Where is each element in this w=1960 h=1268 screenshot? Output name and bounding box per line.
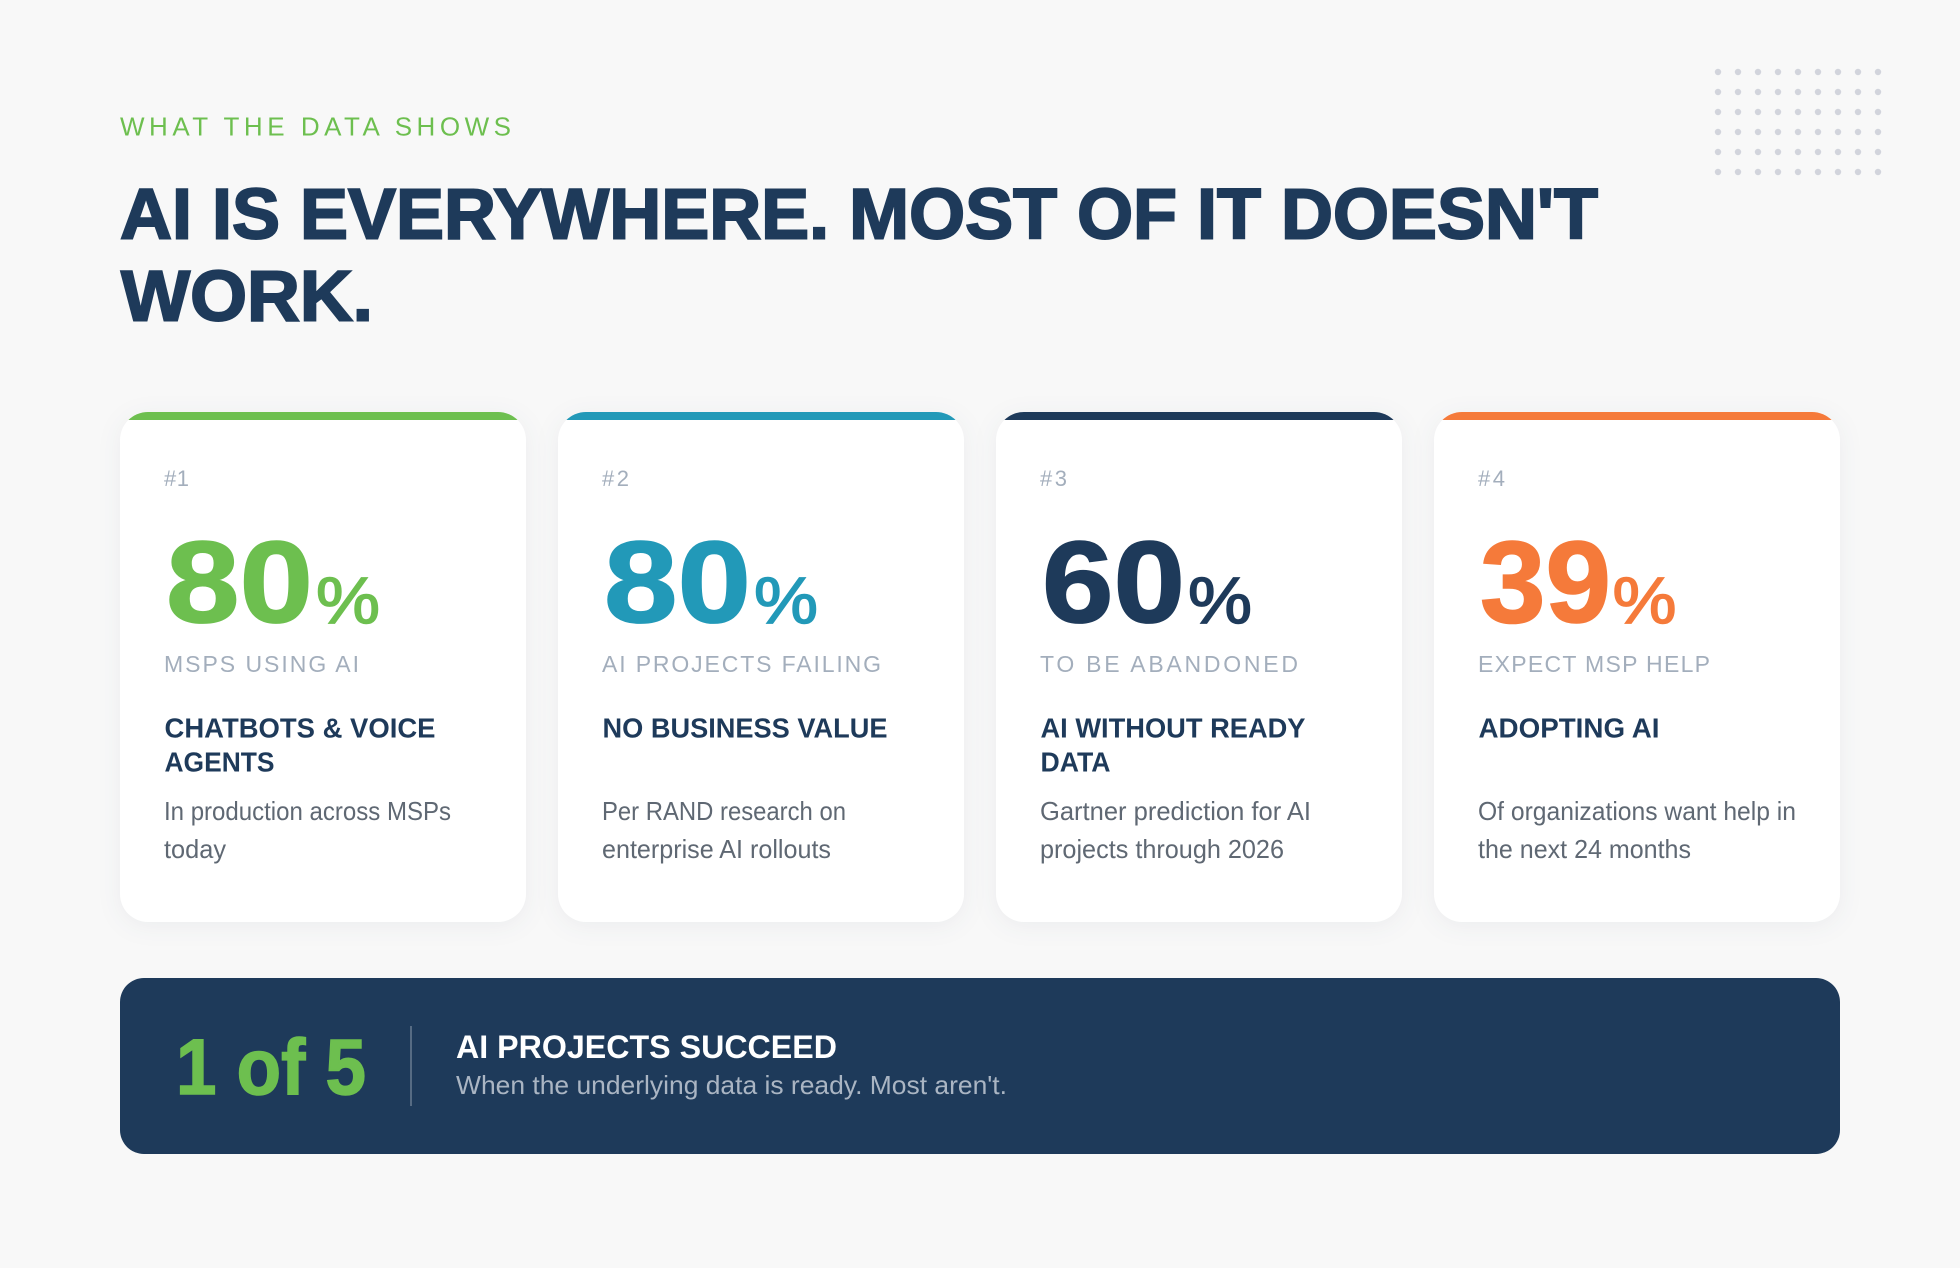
- stat value: 80: [166, 517, 313, 647]
- title: AI IS EVERYWHERE. MOST OF IT DOESN'T: [120, 176, 1598, 254]
- card background: [558, 412, 964, 922]
- description: [602, 796, 846, 864]
- card background: [1434, 412, 1840, 922]
- eyebrow: WHAT THE DATA SHOWS: [120, 112, 511, 142]
- heading: AI WITHOUT READY: [1040, 712, 1306, 744]
- stat value: %: [316, 563, 380, 637]
- heading: ADOPTING AI: [1478, 712, 1660, 744]
- stat label: AI PROJECTS FAILING: [602, 651, 881, 677]
- stat value: [1042, 517, 1252, 647]
- heading: CHATBOTS & VOICE: [164, 712, 436, 744]
- stat label: EXPECT MSP HELP: [1478, 651, 1710, 677]
- accent bar: [1434, 412, 1840, 420]
- banner stat: 1 of 5: [176, 1022, 366, 1111]
- heading: DATA: [1040, 746, 1110, 778]
- banner heading: AI PROJECTS SUCCEED: [456, 1029, 837, 1065]
- banner divider: [410, 1026, 412, 1106]
- card background: [120, 412, 526, 922]
- stat value: 80: [604, 517, 751, 647]
- panel: card 1: [128, 412, 518, 864]
- description: In production across MSPs: [164, 796, 451, 826]
- decorative dot grid: [1715, 69, 1881, 175]
- heading: AGENTS: [164, 746, 274, 778]
- description: today: [164, 834, 226, 864]
- description: enterprise AI rollouts: [602, 834, 831, 864]
- panel: card 2: [566, 412, 956, 864]
- card background: [996, 412, 1402, 922]
- stat value: [604, 517, 818, 647]
- heading: [164, 712, 436, 778]
- description: the next 24 months: [1478, 834, 1691, 864]
- panel: card 3: [1004, 412, 1394, 864]
- stat label: MSPS USING AI: [164, 651, 359, 677]
- description: [1478, 796, 1796, 864]
- stat value: [166, 517, 380, 647]
- description: Gartner prediction for AI: [1040, 796, 1311, 826]
- heading: NO BUSINESS VALUE: [602, 712, 888, 744]
- description: [164, 796, 451, 864]
- description: [1040, 796, 1311, 864]
- rank: #4: [1478, 466, 1505, 491]
- accent bar: [120, 412, 526, 420]
- banner subtext: When the underlying data is ready. Most aren't.: [456, 1070, 1007, 1100]
- panel: card 4: [1442, 412, 1832, 858]
- banner: [120, 978, 1840, 1154]
- description: Per RAND research on: [602, 796, 846, 826]
- rank: #3: [1040, 466, 1067, 491]
- heading: [1040, 712, 1306, 778]
- stat value: [1480, 517, 1676, 647]
- accent bar: [996, 412, 1402, 420]
- description: Of organizations want help in: [1478, 796, 1796, 826]
- banner background: [120, 978, 1840, 1154]
- rank: #1: [164, 466, 189, 491]
- title: [120, 176, 1598, 336]
- stat value: 60: [1042, 517, 1185, 647]
- title: WORK.: [121, 258, 373, 336]
- description: projects through 2026: [1040, 834, 1284, 864]
- stat value: 39: [1480, 517, 1611, 647]
- stat label: TO BE ABANDONED: [1040, 651, 1298, 677]
- stat value: %: [1612, 563, 1676, 637]
- stat value: %: [1188, 563, 1252, 637]
- accent bar: [558, 412, 964, 420]
- rank: #2: [602, 466, 629, 491]
- stat value: %: [754, 563, 818, 637]
